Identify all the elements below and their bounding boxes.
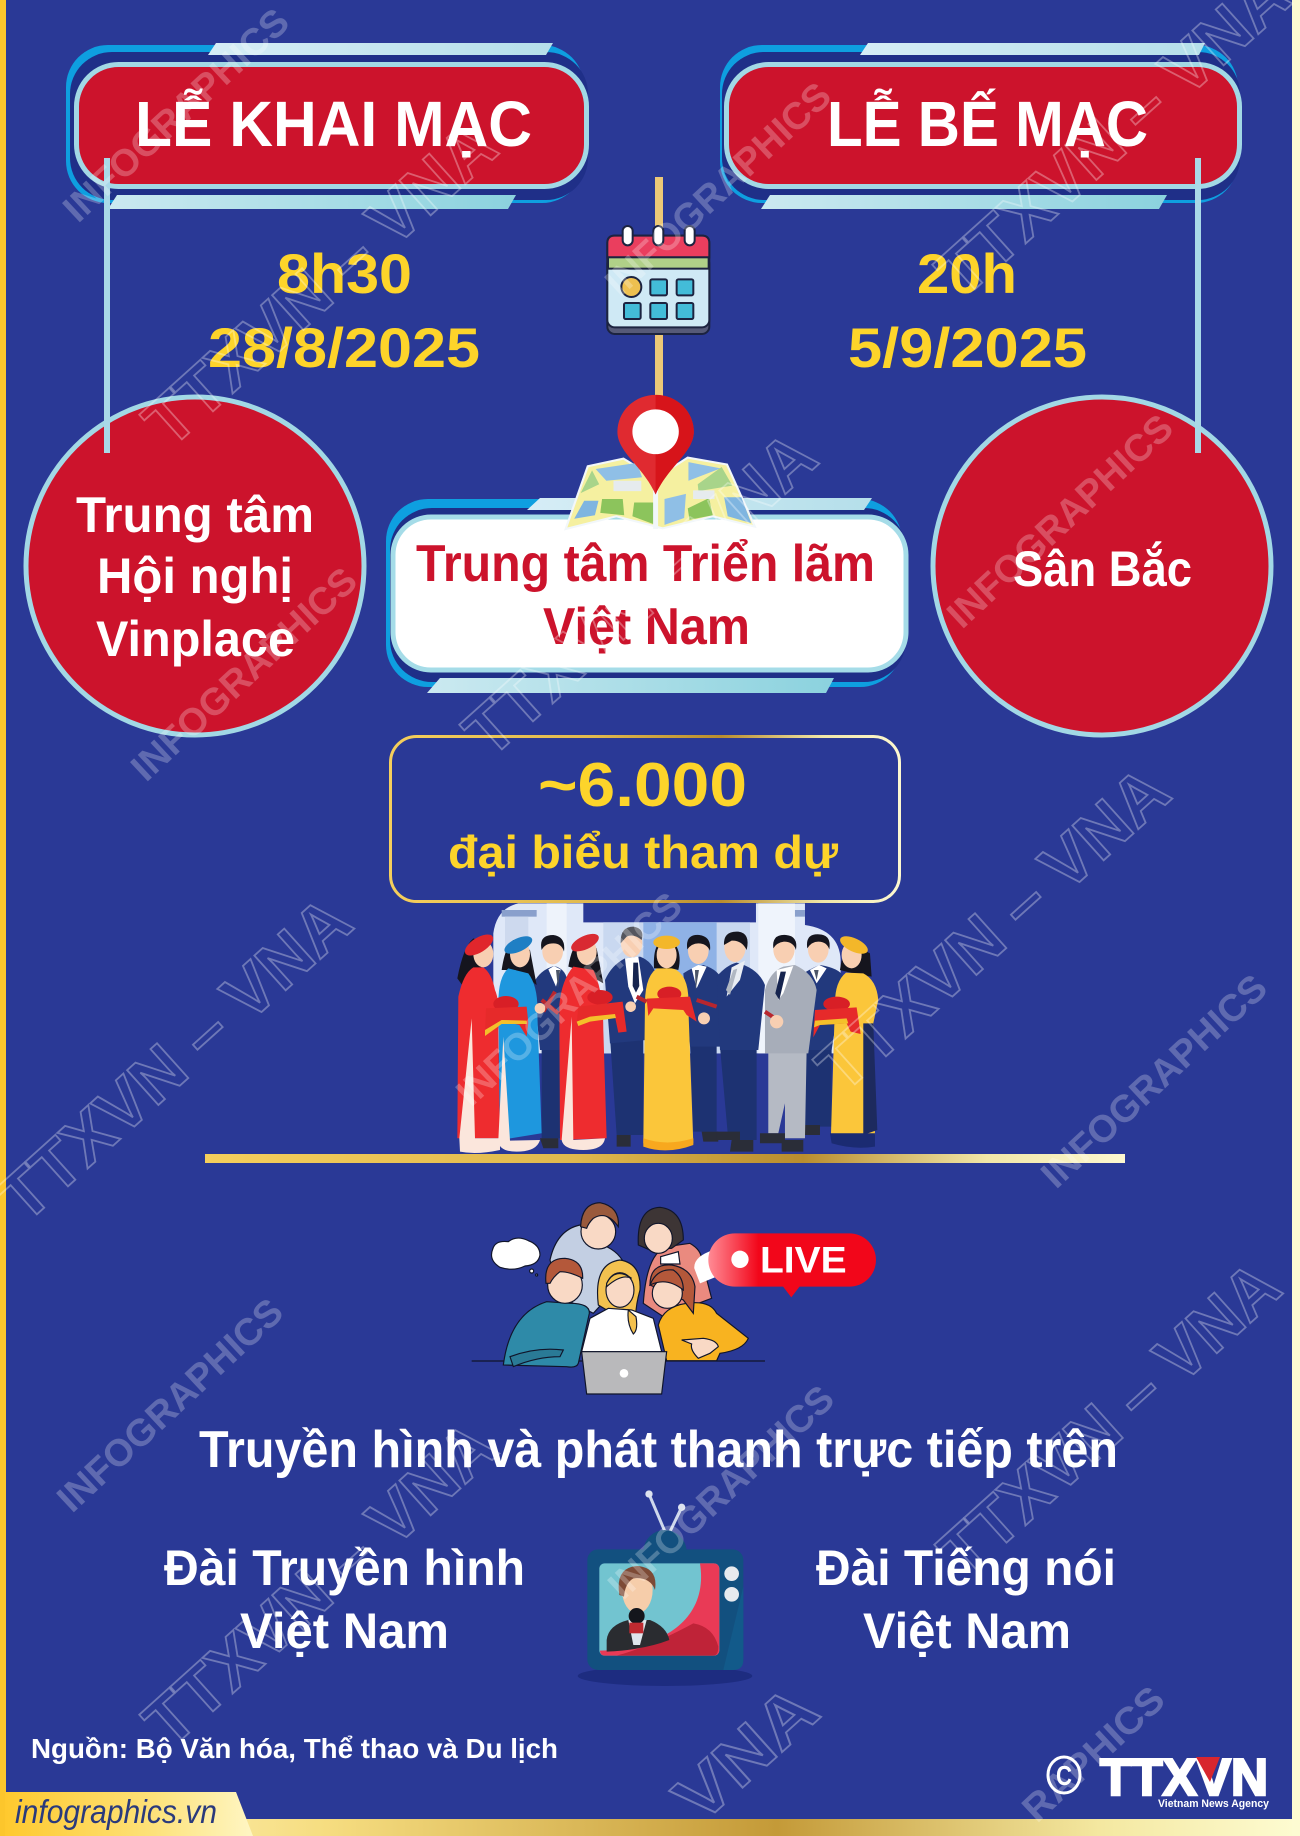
ground line [205,1154,1125,1163]
connector left [104,158,110,453]
opening time [208,242,480,379]
woman red middle [559,930,607,1150]
live badge [694,1233,876,1297]
watermarks: TTXVN – VNA [129,107,511,461]
closing time [848,242,1087,379]
text: VTV: Đài Truyền hình [164,1540,525,1596]
text: VOV: Việt Nam [863,1603,1071,1659]
man grey [760,935,817,1152]
text: VTV: Việt Nam [240,1603,449,1659]
laptop [582,1352,667,1394]
footer bar [5,1792,1292,1836]
man navy center left [605,927,657,1147]
thought bubble [491,1238,540,1276]
site name: infographics.vn [15,1793,217,1830]
banner title right: LỄ BẾ MẠC [827,88,1148,160]
watermarks: TTXVN – VNA [924,1247,1295,1591]
circle: Vinplace [26,397,364,735]
woman blue [498,933,542,1152]
panel: venue: Việt Nam [543,598,750,656]
opening time: 8h30 [277,242,412,305]
text: VOV: Đài Tiếng nói [816,1540,1116,1596]
panel: venue [386,498,906,693]
woman red left [457,930,500,1153]
opening time: 28/8/2025 [208,316,480,379]
back man [550,1225,627,1313]
ribbons [485,987,861,1037]
source: Nguồn: Bộ Văn hóa, Thể thao và Du lịch [31,1733,558,1764]
banner: Lễ bế mạc [720,43,1240,209]
delegate label: đại biểu tham dự [448,826,839,878]
middle woman [598,1260,640,1333]
watermarks: INFOGRAPHICS [448,885,691,1115]
panel: delegates [390,736,900,902]
watermarks: INFOGRAPHICS [600,1378,843,1608]
watermarks: INFOGRAPHICS [1033,967,1276,1197]
logo: TTXVN: Vietnam News Agency [1158,1798,1270,1810]
connector right [1195,158,1201,453]
logo: TTXVN: C [1056,1760,1072,1791]
man navy right [717,932,765,1152]
illustration: ribbon cutting ceremony [457,903,878,1153]
circle: Vinplace: Trung tâm [76,487,314,543]
text: VOV [816,1540,1116,1659]
back woman [643,1243,712,1317]
banner: Lễ khai mạc [66,43,588,209]
back men [533,934,843,1148]
right woman [658,1303,748,1361]
closing time: 20h [917,242,1017,305]
watermarks: TTXVN – VNA [129,1407,511,1761]
center line [655,177,663,402]
watermarks: INFOGRAPHICS [49,1291,292,1521]
front man [503,1302,589,1367]
closing time: 5/9/2025 [848,316,1087,379]
watermarks: INFOGRAPHICS [597,75,840,305]
circle: Sân Bắc: Sân Bắc [1013,541,1192,597]
venue name: Trung tâm Triển lãm [416,535,875,593]
logo: TTXVN: TTXVN [1100,1749,1268,1807]
circle: Sân Bắc [933,397,1271,735]
watermarks: VNA [659,1670,833,1836]
illustration: people watching live [472,1203,876,1394]
circle: Vinplace: Vinplace [96,611,295,667]
live badge: LIVE [760,1240,847,1281]
delegate count: ~6.000 [538,751,747,820]
watermarks: RAPHICS [1014,1678,1173,1831]
icon: map and pin [566,395,755,529]
icon: television [578,1490,752,1686]
watermarks: TTXVN – VNA [449,417,831,771]
watermarks: TTXVN – VNA [802,752,1184,1106]
banner title left: LỄ KHAI MẠC [135,88,532,160]
icon: calendar [607,226,709,334]
circle: Vinplace: Hội nghị [97,548,293,604]
heading: broadcast: Truyền hình và phát thanh trực tiếp trên [199,1421,1118,1479]
watermarks: INFOGRAPHICS [939,407,1182,637]
woman yellow right [830,933,878,1148]
text: VTV [164,1540,525,1659]
woman yellow center [643,936,693,1150]
watermarks: INFOGRAPHICS [123,560,366,790]
watermarks: INFOGRAPHICS [55,1,298,231]
